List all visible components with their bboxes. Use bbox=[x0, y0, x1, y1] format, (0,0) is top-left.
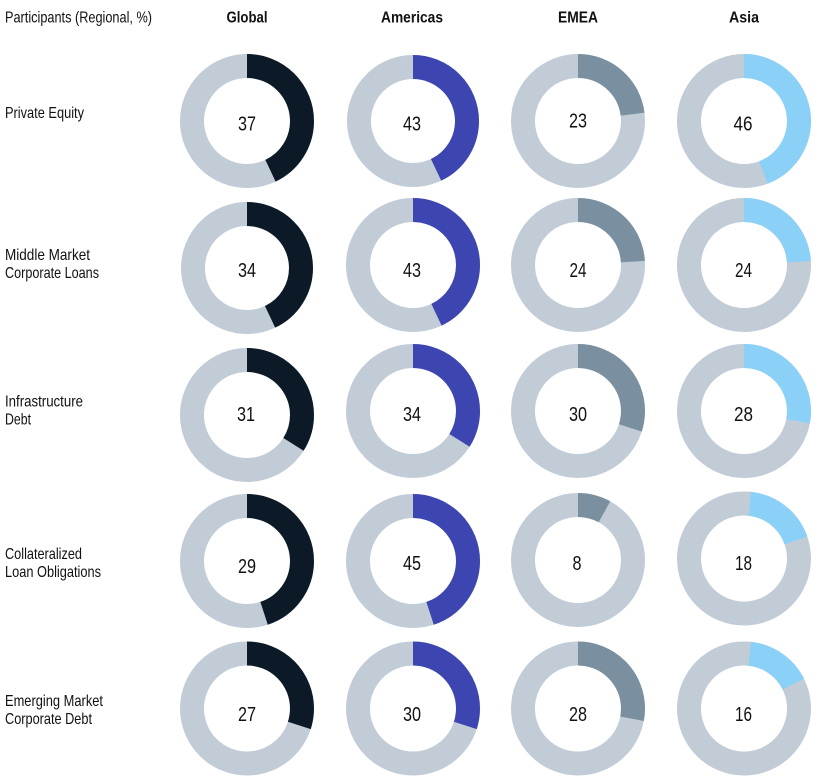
donut: Emerging Market Americas 30 bbox=[358, 654, 468, 764]
donut: CLO Americas 45: 45 bbox=[403, 553, 421, 575]
heading: participants: Participants (Regional, %) bbox=[5, 10, 152, 26]
donut: Emerging Market EMEA 28: 28 bbox=[569, 704, 587, 726]
donut: Private Equity EMEA 23 bbox=[523, 66, 633, 176]
column heading: Americas: Americas bbox=[381, 10, 443, 26]
donut: Private Equity Asia 46: 46 bbox=[734, 114, 752, 136]
donut: Emerging Market Asia 16: 16 bbox=[735, 704, 752, 726]
donut: Infrastructure Debt EMEA 30 bbox=[523, 356, 633, 466]
donut: Emerging Market Asia 16 bbox=[684, 648, 804, 769]
donut: Infrastructure Debt Asia 28: 28 bbox=[734, 404, 753, 426]
donut: Private Equity Global 37: 37 bbox=[238, 114, 256, 136]
donut: Private Equity Asia 46 bbox=[689, 66, 799, 176]
donut: Emerging Market Global 27: 27 bbox=[238, 704, 256, 726]
donut: Emerging Market Americas 30: 30 bbox=[403, 704, 421, 726]
row label: Emerging Market Corporate Debt: Corporate Debt bbox=[5, 711, 92, 728]
donut: CLO Global 29: 29 bbox=[238, 556, 256, 578]
donut: Middle Market Global 34 bbox=[193, 214, 301, 322]
donut: CLO EMEA 8 bbox=[523, 505, 633, 615]
row label: Emerging Market Corporate Debt bbox=[5, 693, 103, 728]
donut: Infrastructure Debt Americas 34 bbox=[358, 356, 468, 466]
donut: CLO EMEA 8: 8 bbox=[572, 553, 582, 575]
donut: Infrastructure Debt Global 31: 31 bbox=[237, 404, 255, 426]
donut: CLO Global 29 bbox=[192, 506, 302, 616]
row label: Collateralized Loan Obligations: Loan Obligations bbox=[5, 564, 101, 581]
row label: Infrastructure Debt: Debt bbox=[5, 412, 31, 428]
donut: Infrastructure Debt Global 31 bbox=[192, 360, 302, 470]
row label: Infrastructure Debt bbox=[5, 394, 83, 428]
column heading: EMEA: EMEA bbox=[558, 10, 598, 26]
row label: Emerging Market Corporate Debt: Emerging Market bbox=[5, 693, 103, 710]
donut: Infrastructure Debt Asia 28 bbox=[689, 356, 799, 466]
donut: Middle Market Asia 24: 24 bbox=[735, 260, 752, 282]
donut: Private Equity EMEA 23: 23 bbox=[569, 110, 587, 132]
donut: Emerging Market EMEA 28 bbox=[523, 654, 633, 764]
donut: Middle Market Global 34: 34 bbox=[238, 260, 256, 282]
column heading: Asia: Asia bbox=[729, 10, 759, 26]
donut: Infrastructure Debt Americas 34: 34 bbox=[403, 404, 421, 426]
row label: Infrastructure Debt: Infrastructure bbox=[5, 394, 83, 410]
donut: Middle Market Americas 43 bbox=[358, 210, 468, 320]
donut: CLO Asia 18 bbox=[684, 498, 804, 619]
donut: Middle Market EMEA 24 bbox=[523, 210, 633, 320]
donut: Private Equity Global 37 bbox=[192, 66, 302, 176]
column heading: Global: Global bbox=[226, 10, 268, 26]
donut: Emerging Market Global 27 bbox=[192, 654, 302, 764]
row label: Middle Market Corporate Loans bbox=[5, 247, 99, 282]
row label: Middle Market Corporate Loans: Middle Market bbox=[5, 247, 90, 264]
donut: Infrastructure Debt EMEA 30: 30 bbox=[569, 404, 587, 426]
donut: Middle Market Americas 43: 43 bbox=[403, 260, 421, 282]
donut: CLO Asia 18: 18 bbox=[735, 553, 752, 575]
row label: Private Equity: Private Equity bbox=[5, 105, 84, 122]
row label: Collateralized Loan Obligations: Collateralized bbox=[5, 546, 82, 563]
row label: Collateralized Loan Obligations bbox=[5, 546, 101, 581]
row label: Middle Market Corporate Loans: Corporate Loans bbox=[5, 265, 99, 282]
donut: Middle Market EMEA 24: 24 bbox=[570, 260, 586, 282]
donut: CLO Americas 45 bbox=[358, 506, 468, 616]
donut: Private Equity Americas 43: 43 bbox=[403, 114, 421, 136]
donut: Middle Market Asia 24 bbox=[689, 210, 799, 320]
donut: Private Equity Americas 43 bbox=[359, 67, 467, 175]
